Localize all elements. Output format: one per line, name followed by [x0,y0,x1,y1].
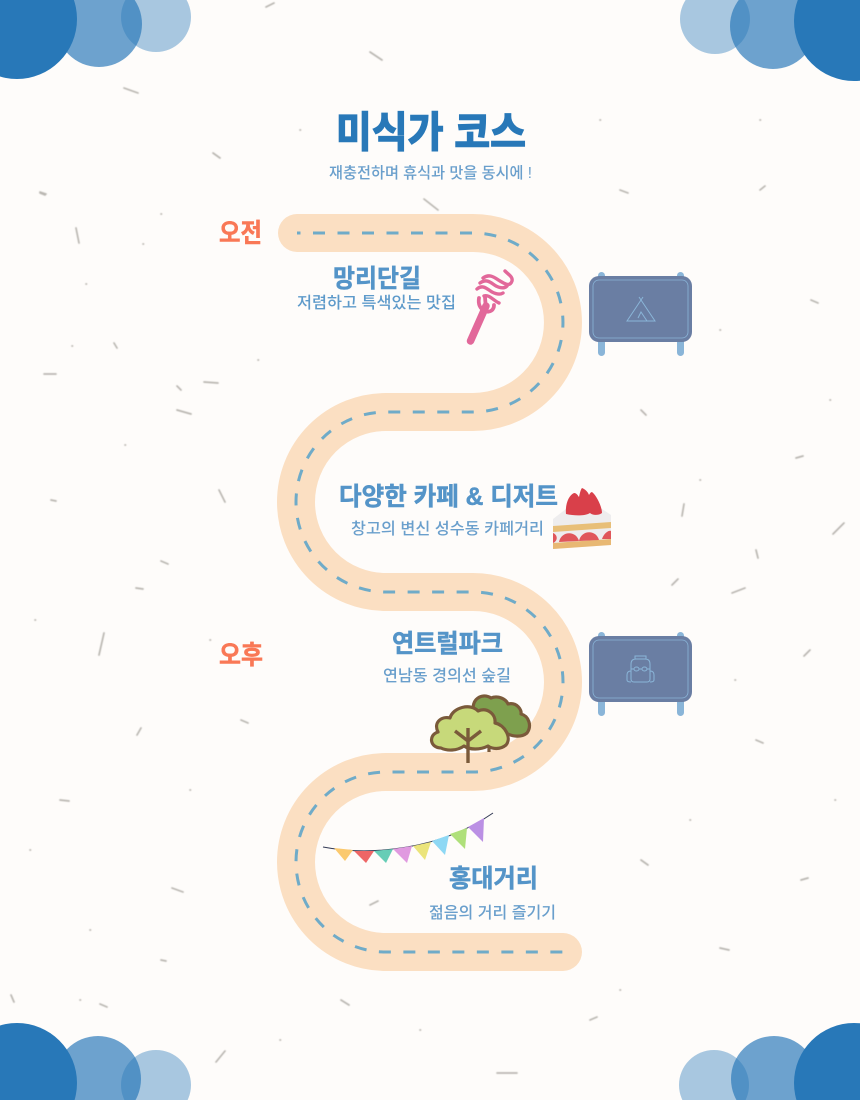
stop 3 description: 연남동 경의선 숲길 [383,667,511,685]
icon: fork with noodles [470,271,512,341]
sign board: backpack [589,632,692,716]
icon: trees [432,696,529,763]
icon: tent [627,297,655,321]
decoration: top-left circles [0,0,191,79]
stop 3 heading: 연트럴파크 [392,630,503,658]
decoration: bottom-left circles [0,1023,191,1100]
icon: backpack [627,656,654,682]
icon: bunting flags [323,813,493,863]
stop 1 heading: 망리단길 [333,265,421,293]
stop 4 description: 젊음의 거리 즐기기 [429,904,556,922]
decoration: top-right circles [680,0,860,81]
title: 미식가 코스 [336,109,526,156]
stop 2 heading: 다양한 카페 & 디저트 [339,483,558,511]
stop 2 description: 창고의 변신 성수동 카페거리 [351,520,544,538]
icon: strawberry cake [553,488,611,549]
label: morning: 오전 [219,218,262,248]
winding road [296,233,563,952]
sign board: tent [589,272,692,356]
stop 4 heading: 홍대거리 [449,865,538,893]
decoration: bottom-right circles [679,1023,860,1100]
label: afternoon: 오후 [219,640,263,670]
subtitle: 재충전하며 휴식과 맛을 동시에 ! [329,164,532,182]
stop 1 description: 저렴하고 특색있는 맛집 [297,294,456,312]
